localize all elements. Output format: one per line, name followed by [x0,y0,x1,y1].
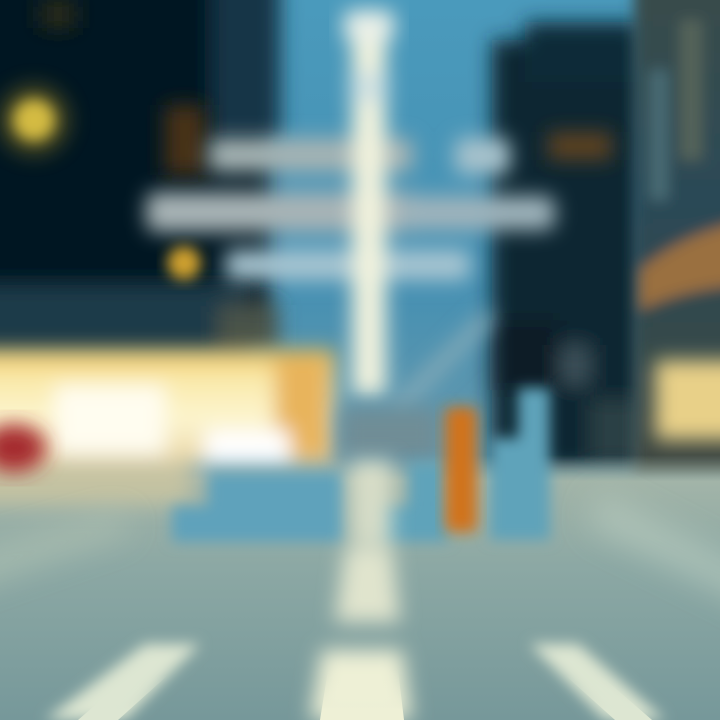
left dark building [0,0,280,355]
background: sky [0,0,720,480]
chart: blue left steps [172,472,344,542]
road centre dashes [310,460,412,720]
amber window glows [40,0,612,175]
dark chart shadow [340,408,440,460]
yellow bullet dot [167,246,201,280]
right glowing storefront [655,360,720,440]
road left lane marking [45,644,200,720]
chart: orange bar [445,407,477,532]
left glowing storefront [0,350,335,504]
road right lane marking [530,644,665,720]
road surface [0,455,720,720]
far right tower [634,0,720,480]
right dark building [490,22,642,470]
central white light column [344,10,394,395]
chart: blue centre bar [378,462,448,542]
red car [0,424,46,472]
road faint side marking left [0,515,130,590]
headline text block, illegible blur [146,138,555,280]
street lamp glow [0,84,70,156]
chart: blue tall right bar [490,388,550,540]
diagonal arrow line [395,315,490,410]
road faint side marking right [590,495,720,610]
